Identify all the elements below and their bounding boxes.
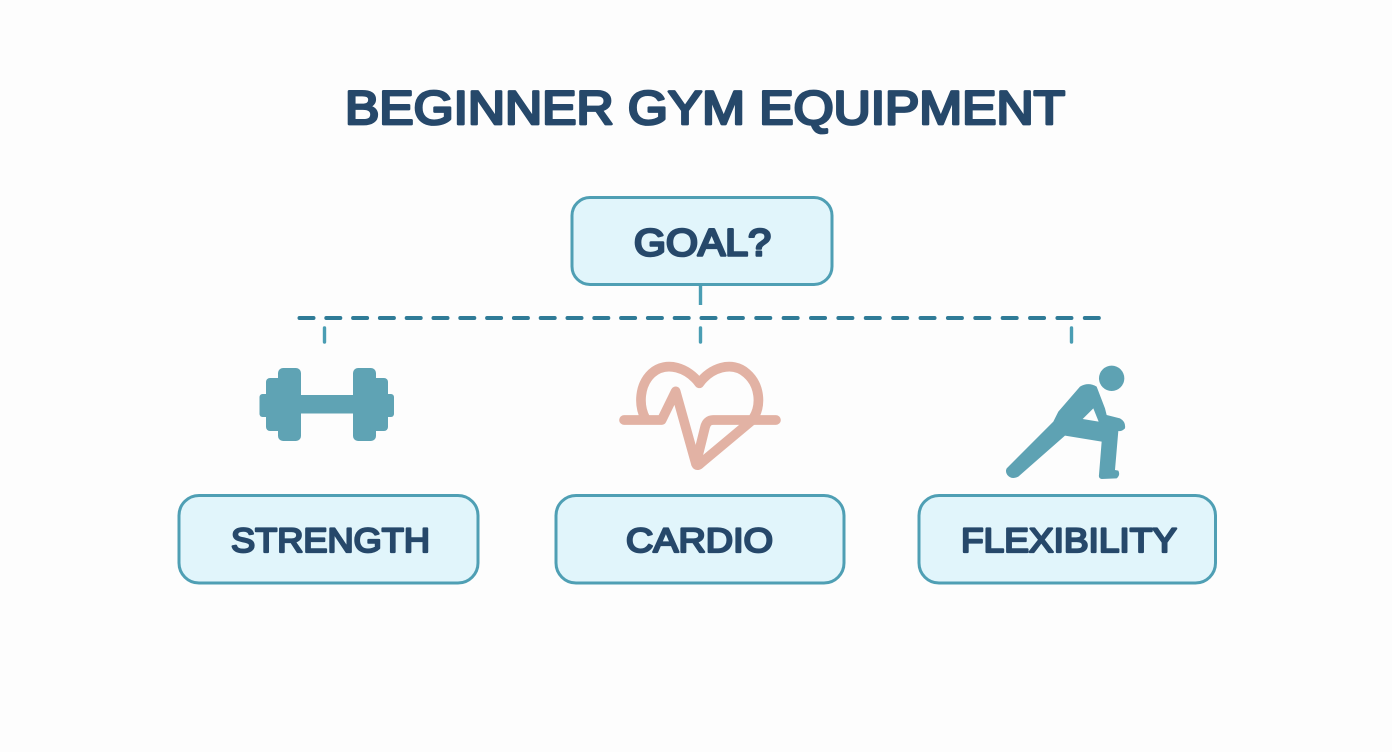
icon: heart with pulse xyxy=(624,367,776,465)
dashed branch line xyxy=(300,316,1099,320)
strength label: STRENGTH xyxy=(231,522,430,560)
flexibility label: FLEXIBILITY xyxy=(961,522,1177,560)
connector: cardio drop xyxy=(699,328,702,342)
option box: cardio xyxy=(556,496,844,583)
icon: dumbbell xyxy=(260,368,394,441)
connector: strength drop xyxy=(323,328,326,342)
connector: goal to branch line xyxy=(699,285,702,305)
connector: flexibility drop xyxy=(1070,328,1073,342)
icon: stretching figure xyxy=(1006,366,1125,479)
cardio label: CARDIO xyxy=(626,522,773,560)
option box: flexibility xyxy=(919,496,1216,583)
decision box: goal xyxy=(572,198,832,284)
goal label: GOAL? xyxy=(634,222,771,264)
title: BEGINNER GYM EQUIPMENT xyxy=(345,81,1065,134)
option box: strength xyxy=(179,496,478,583)
